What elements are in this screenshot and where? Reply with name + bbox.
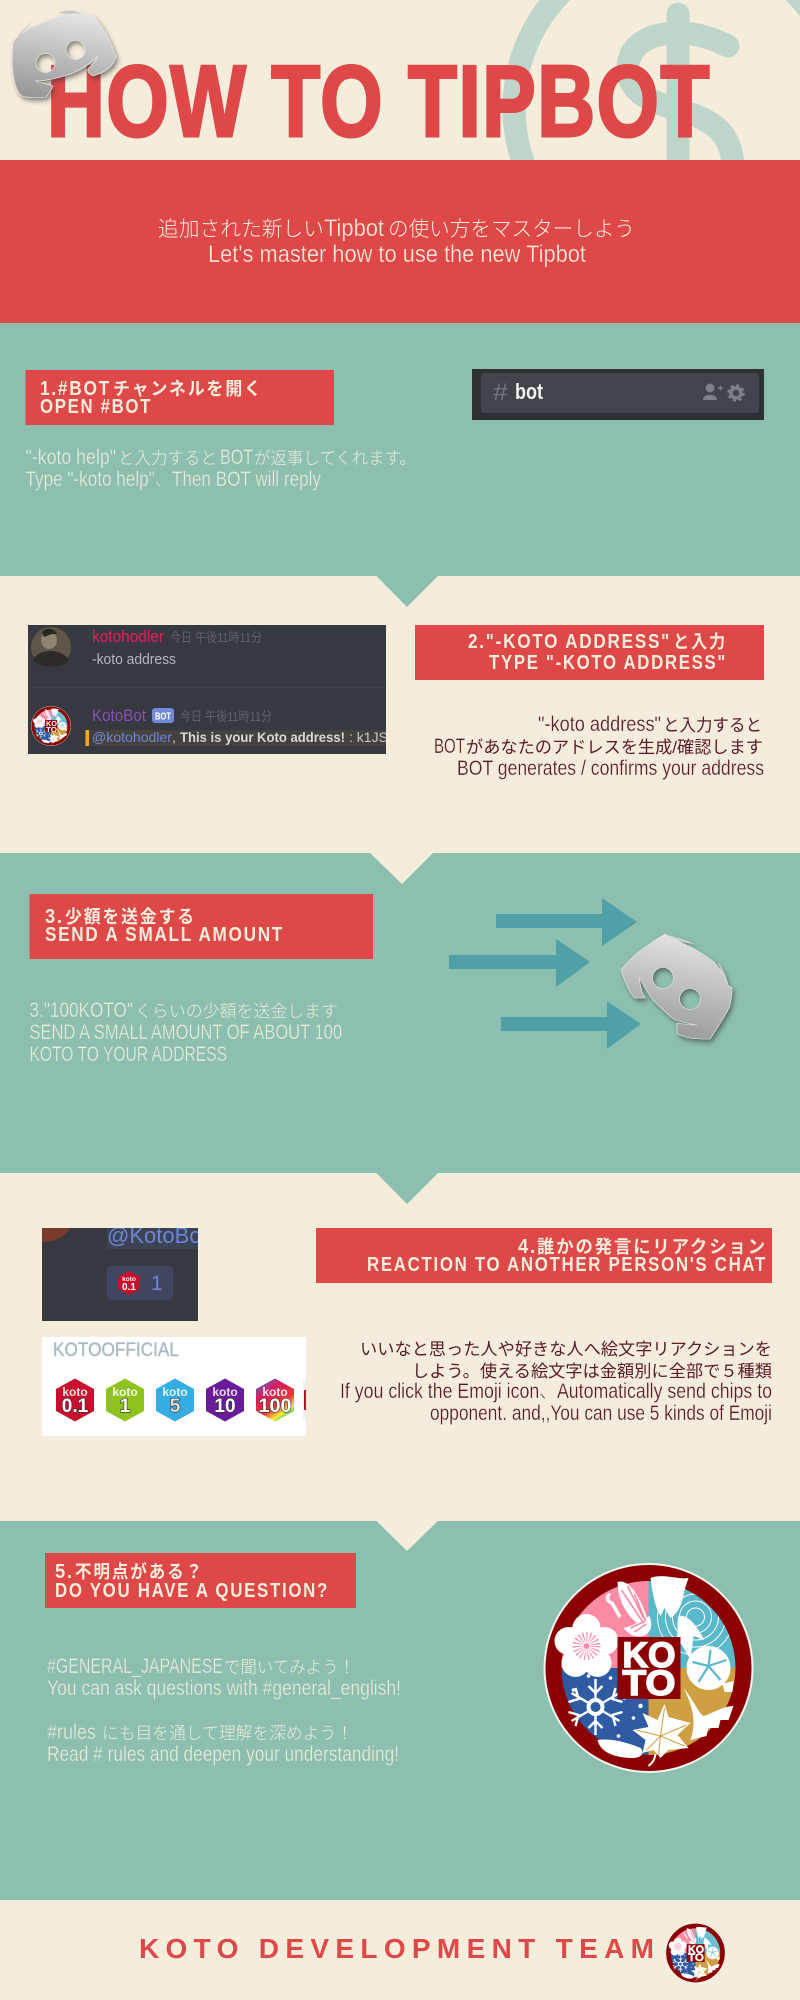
- panel: step 4: [42, 1223, 772, 1436]
- subtitle japanese: Tipbot: [324, 215, 384, 242]
- subtitle band: [0, 160, 800, 323]
- icon: discord logo: [621, 934, 732, 1039]
- text block: step 3: [30, 999, 342, 1066]
- emoji: 5: koto: [162, 1385, 188, 1399]
- emoji: 1: koto: [112, 1385, 138, 1399]
- discord chat screenshot: 今日 午後11時11分: [170, 630, 262, 645]
- discord chat screenshot: BOT: [155, 710, 171, 722]
- heading: step 1: [26, 370, 334, 425]
- subtitle english: Let's master how to use the new Tipbot: [208, 241, 586, 268]
- text block: step 3: くらいの少額を送金します: [135, 1002, 338, 1021]
- emoji: koto 0.1: 0.1: [122, 1282, 136, 1293]
- text block: step 1: が返事してくれます。: [254, 449, 416, 468]
- discord chat screenshot: 今日 午後11時11分: [180, 709, 272, 724]
- heading: step 3: 3.: [45, 906, 64, 928]
- text block: step 5: [47, 1655, 401, 1766]
- icon: small koto logo: [666, 1923, 725, 1983]
- discord chat screenshot: kotohodler: [92, 627, 164, 646]
- avatar: koto logo: [31, 706, 71, 746]
- avatar: user photo: [31, 627, 71, 667]
- emoji: 10: koto: [212, 1385, 238, 1399]
- emoji: 1: [106, 1378, 144, 1422]
- arrow: bottom: [501, 1001, 641, 1049]
- text block: step 2: BOT: [434, 735, 465, 758]
- icon: small koto logo: TO: [688, 1952, 704, 1964]
- text block: step 5: #GENERAL_JAPANESE: [47, 1655, 223, 1678]
- heading: step 2: 2."-KOTO ADDRESS": [468, 631, 671, 653]
- text block: step 2: があなたのアドレスを生成/確認します: [466, 738, 763, 757]
- discord chat screenshot: This is your Koto address!: [180, 729, 345, 745]
- text block: step 1: Type "-koto help"、Then BOT will reply: [26, 468, 321, 491]
- heading: step 4: [316, 1228, 772, 1283]
- heading: step 4: 誰かの発言にリアクション: [537, 1237, 767, 1257]
- icon: discord logo: [12, 11, 116, 98]
- text block: step 4: [340, 1340, 772, 1425]
- subtitle japanese: 追加された新しい: [158, 218, 324, 241]
- subtitle japanese: の使い方をマスターしよう: [388, 218, 635, 241]
- text block: step 3: KOTO TO YOUR ADDRESS: [30, 1043, 227, 1066]
- heading: step 5: 5.: [55, 1561, 74, 1583]
- emoji: koto 0.1: [118, 1271, 140, 1295]
- arrow: top: [496, 898, 637, 946]
- heading: step 1: OPEN #BOT: [40, 396, 152, 418]
- panel: step 2: [28, 625, 764, 780]
- text block: step 1: と入力すると: [118, 449, 217, 468]
- discord chat screenshot: KotoBot: [92, 706, 146, 725]
- emoji: 100: koto: [262, 1385, 288, 1399]
- text block: step 1: "-koto help": [26, 446, 116, 469]
- subtitle japanese: [158, 215, 635, 242]
- heading: step 5: DO YOU HAVE A QUESTION?: [55, 1580, 329, 1602]
- arrow: middle: [449, 939, 590, 987]
- text block: step 2: "-koto address": [538, 713, 661, 736]
- emoji: koto 0.1: koto: [122, 1276, 136, 1283]
- text block: step 1: BOT: [220, 446, 253, 469]
- reaction screenshot: 1: [151, 1272, 163, 1295]
- discord channel bar: [472, 369, 764, 420]
- heading: step 2: TYPE "-KOTO ADDRESS": [489, 652, 727, 674]
- discord chat screenshot: -koto address: [92, 651, 176, 668]
- panel: step 3: [0, 853, 800, 1204]
- icon: koto logo: TO: [622, 1664, 675, 1703]
- icon: koto logo: KO: [622, 1636, 676, 1675]
- heading: step 3: [30, 894, 373, 959]
- icon: dollar coin: [514, 0, 800, 272]
- discord chat screenshot: @kotohodler: [92, 729, 172, 745]
- text block: step 4: しよう。使える絵文字は金額別に全部で５種類: [412, 1361, 772, 1381]
- reaction screenshot: [42, 1228, 198, 1321]
- emoji: 10: 10: [214, 1396, 236, 1417]
- text block: step 1: [26, 446, 416, 491]
- text block: step 5: で聞いてみよう！: [224, 1658, 355, 1677]
- discord channel bar: #: [493, 379, 509, 406]
- emoji: 5: [156, 1378, 194, 1422]
- footer: [139, 1923, 725, 1983]
- avatar: koto logo: TO: [46, 727, 58, 734]
- emoji list screenshot: KOTOOFFICIAL: [53, 1340, 179, 1361]
- heading: step 5: 不明点がある？: [75, 1561, 204, 1582]
- discord chat screenshot: : k1JSc: [349, 729, 395, 745]
- emoji: 5: 5: [170, 1396, 181, 1417]
- text block: step 3: SEND A SMALL AMOUNT OF ABOUT 100: [30, 1021, 342, 1044]
- emoji: 0.1: [56, 1378, 94, 1422]
- text block: step 3: 3."100KOTO": [30, 999, 133, 1022]
- emoji: 0.1: 0.1: [62, 1396, 89, 1417]
- icon: small koto logo: KO: [688, 1944, 704, 1956]
- emoji: 100: [256, 1378, 294, 1422]
- panel: step 1: [0, 323, 800, 607]
- heading: step 3: SEND A SMALL AMOUNT: [45, 924, 284, 946]
- reaction screenshot: @KotoBot: [107, 1223, 208, 1248]
- discord chat screenshot: [28, 625, 395, 754]
- avatar: koto logo: KO: [46, 721, 58, 728]
- emoji: 100: 100: [258, 1396, 292, 1417]
- emoji: 1: 1: [120, 1396, 131, 1417]
- panel: step 5: [0, 1521, 800, 1900]
- heading: step 1: チャンネルを開く: [113, 379, 263, 399]
- footer team name: KOTO DEVELOPMENT TEAM: [139, 1933, 654, 1964]
- emoji list screenshot: [42, 1337, 306, 1436]
- text block: step 5: #rules: [47, 1721, 96, 1744]
- heading: step 4: 4.: [518, 1236, 537, 1258]
- discord chat screenshot: ,: [172, 729, 176, 745]
- header panel: [12, 0, 800, 272]
- heading: step 5: [45, 1553, 356, 1608]
- emoji: 10: [206, 1378, 244, 1422]
- discord channel bar: bot: [515, 379, 544, 404]
- heading: step 1: 1.#BOT: [40, 378, 111, 400]
- text block: step 5: にも目を通して理解を深めよう！: [102, 1724, 353, 1743]
- text block: step 5: You can ask questions with #general_english!: [47, 1677, 401, 1700]
- heading: step 3: 少額を送金する: [65, 907, 196, 927]
- text block: step 4: いいなと思った人や好きな人へ絵文字リアクションを: [360, 1340, 772, 1359]
- text block: step 2: と入力すると: [663, 716, 762, 735]
- heading: step 2: [415, 625, 764, 680]
- heading: step 2: と入力: [673, 632, 727, 652]
- text block: step 5: Read # rules and deepen your understanding!: [47, 1743, 399, 1766]
- emoji: 0.1: koto: [62, 1385, 88, 1399]
- text block: step 2: [434, 713, 764, 780]
- icon: koto logo: [544, 1564, 752, 1772]
